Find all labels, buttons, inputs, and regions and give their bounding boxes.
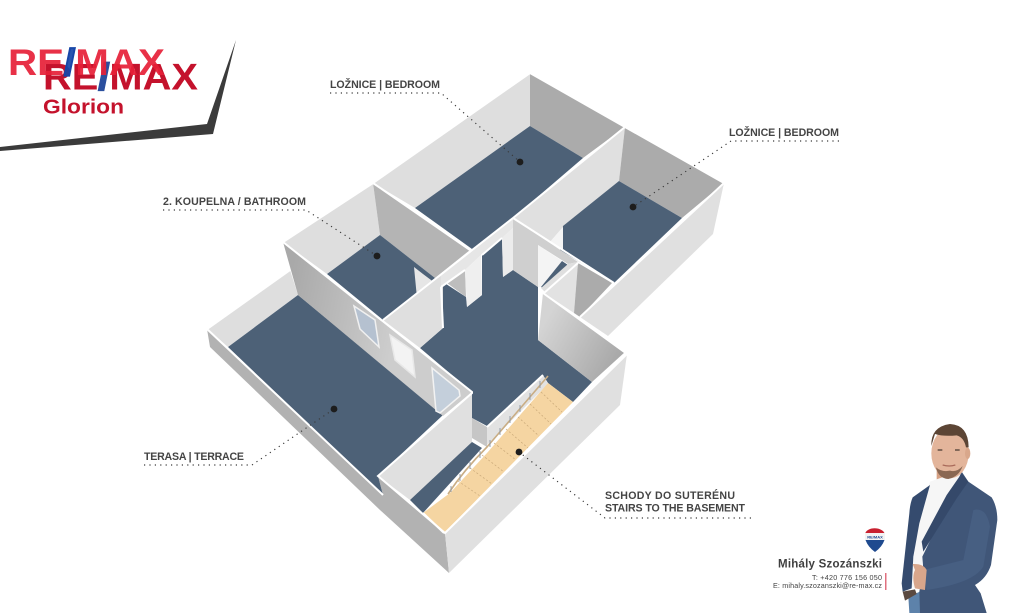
callout: terrace bbox=[144, 406, 337, 465]
room: bathroom bbox=[283, 183, 470, 320]
label: bedroom 1: LOŽNICE | BEDROOM bbox=[330, 78, 440, 91]
room: central hall bbox=[383, 218, 625, 426]
wall: hall right bbox=[538, 293, 625, 382]
agent name: Mihály Szozánszki bbox=[778, 558, 882, 570]
photo: hand bbox=[913, 564, 927, 590]
balloon: red crown bbox=[865, 528, 885, 535]
callout: bedroom 2 bbox=[630, 126, 839, 210]
photo: jacket right side bbox=[919, 472, 997, 613]
room: bedroom 2 bbox=[513, 127, 724, 283]
wall: small return bbox=[472, 418, 487, 447]
door: hall to bedroom 2 bbox=[538, 245, 562, 287]
wall: hall back right bbox=[513, 218, 578, 287]
leader line: bedroom 1 bbox=[330, 93, 520, 162]
marker: stairs bbox=[516, 449, 522, 455]
window: terrace middle bbox=[390, 335, 415, 377]
logo bar: dark angular frame bbox=[0, 40, 236, 151]
room: terrace bbox=[207, 242, 472, 495]
floor: bathroom bbox=[327, 235, 435, 320]
wall: behind stair bbox=[487, 375, 548, 445]
label: stairs English: STAIRS TO THE BASEMENT bbox=[605, 502, 746, 514]
wall: closet left bbox=[544, 263, 578, 313]
wall: bathroom back right bbox=[373, 183, 470, 278]
window: terrace left bbox=[354, 306, 379, 347]
photo: beard bbox=[936, 466, 963, 479]
photo: neck bbox=[937, 467, 960, 488]
outer wall: front-right face bbox=[445, 354, 627, 573]
wall: bedroom 2 divider bbox=[513, 127, 625, 242]
balloon: white band bbox=[865, 533, 885, 540]
agent phone: T: +420 776 156 050 bbox=[812, 573, 882, 582]
wall: pier 2 bbox=[502, 228, 513, 277]
photo: ear bbox=[965, 448, 970, 459]
door: bedroom 2 bbox=[549, 227, 563, 251]
wall: bedroom 1 back right bbox=[530, 73, 625, 158]
floor: bedroom 2 bbox=[560, 181, 682, 283]
floor: hall bbox=[420, 238, 592, 426]
stairs: tread lines bbox=[458, 392, 562, 496]
outer wall: left and front-left faces bbox=[207, 329, 449, 573]
photo: watch bbox=[903, 589, 917, 601]
outer wall: right bedroom face bbox=[580, 183, 724, 336]
agent email: E: mihaly.szozanszki@re-max.cz bbox=[773, 581, 882, 590]
wall top edges: white outlines bbox=[207, 73, 724, 533]
floor: under stairs bbox=[410, 442, 482, 513]
leader line: stairs bbox=[519, 452, 751, 518]
label: bathroom: 2. KOUPELNA / BATHROOM bbox=[163, 196, 306, 208]
door: bathroom bbox=[414, 267, 435, 298]
photo: eyes bbox=[938, 448, 960, 452]
logo text: RE/MAX dark: RE/MAX bbox=[43, 56, 198, 98]
marker: terrace bbox=[331, 406, 337, 412]
wall: lintel over openings bbox=[441, 218, 513, 287]
callout: stairs bbox=[516, 449, 751, 518]
label: stairs Czech: SCHODY DO SUTERÉNU bbox=[605, 489, 735, 502]
photo: jacket sleeve bbox=[923, 510, 990, 590]
callout: bedroom 1 bbox=[330, 78, 523, 165]
door: terrace glazed bbox=[432, 368, 460, 413]
wall: gray behind opening bbox=[441, 270, 466, 297]
leader line: bathroom bbox=[163, 210, 377, 256]
photo: lapel bbox=[922, 473, 968, 552]
balloon: blue base bbox=[866, 540, 884, 552]
floor: bedroom 1 bbox=[415, 126, 583, 249]
logo: Glorion brand block bbox=[0, 40, 236, 151]
photo: hair bbox=[931, 424, 969, 447]
marker: bedroom 1 bbox=[517, 159, 523, 165]
photo: mouth bbox=[943, 465, 955, 466]
wall: terrace to stairs divider bbox=[378, 392, 472, 500]
stairs: railing bbox=[448, 376, 548, 494]
photo: shirt bbox=[912, 471, 962, 590]
3D floor plan bbox=[207, 73, 724, 573]
marker: bathroom bbox=[374, 253, 380, 259]
wall: bathroom back left bbox=[283, 183, 380, 274]
label: terrace: TERASA | TERRACE bbox=[144, 451, 244, 463]
leader line: bedroom 2 bbox=[633, 141, 839, 207]
stairs: wooden flight bbox=[423, 383, 573, 533]
wall: terrace inner wall with windows bbox=[283, 242, 472, 416]
stairs: balusters bbox=[451, 381, 540, 492]
leader line: terrace bbox=[144, 409, 334, 465]
wall: closet right bbox=[574, 263, 612, 317]
agent photo bbox=[902, 424, 997, 613]
photo: head bbox=[931, 428, 969, 478]
wall: bedroom 1 back left bbox=[373, 73, 530, 208]
balloon: tiny wordmark: RE/MAX bbox=[867, 534, 883, 540]
floor: terrace bbox=[228, 295, 443, 495]
wall: terrace parapet bbox=[207, 270, 298, 347]
room: bedroom 1 bbox=[373, 73, 625, 249]
wall: bedroom 2 back bbox=[619, 127, 724, 218]
floor: visible through door bbox=[541, 261, 568, 289]
photo: jacket left side bbox=[902, 485, 930, 592]
callout: bathroom bbox=[163, 196, 380, 259]
wall: door return bbox=[541, 262, 578, 292]
photo: jeans bbox=[908, 592, 922, 613]
icon: RE/MAX balloon bbox=[865, 528, 885, 552]
wall: hall left segment bbox=[383, 274, 443, 348]
logo text: Glorion: Glorion bbox=[43, 96, 124, 118]
wall: pier 1 bbox=[465, 255, 482, 307]
logo text: RE/MAX bright: RE/MAX bbox=[8, 41, 165, 83]
label: bedroom 2: LOŽNICE | BEDROOM bbox=[729, 126, 839, 139]
marker: bedroom 2 bbox=[630, 204, 636, 210]
room: staircase bbox=[378, 375, 573, 533]
accent bar bbox=[885, 573, 886, 590]
